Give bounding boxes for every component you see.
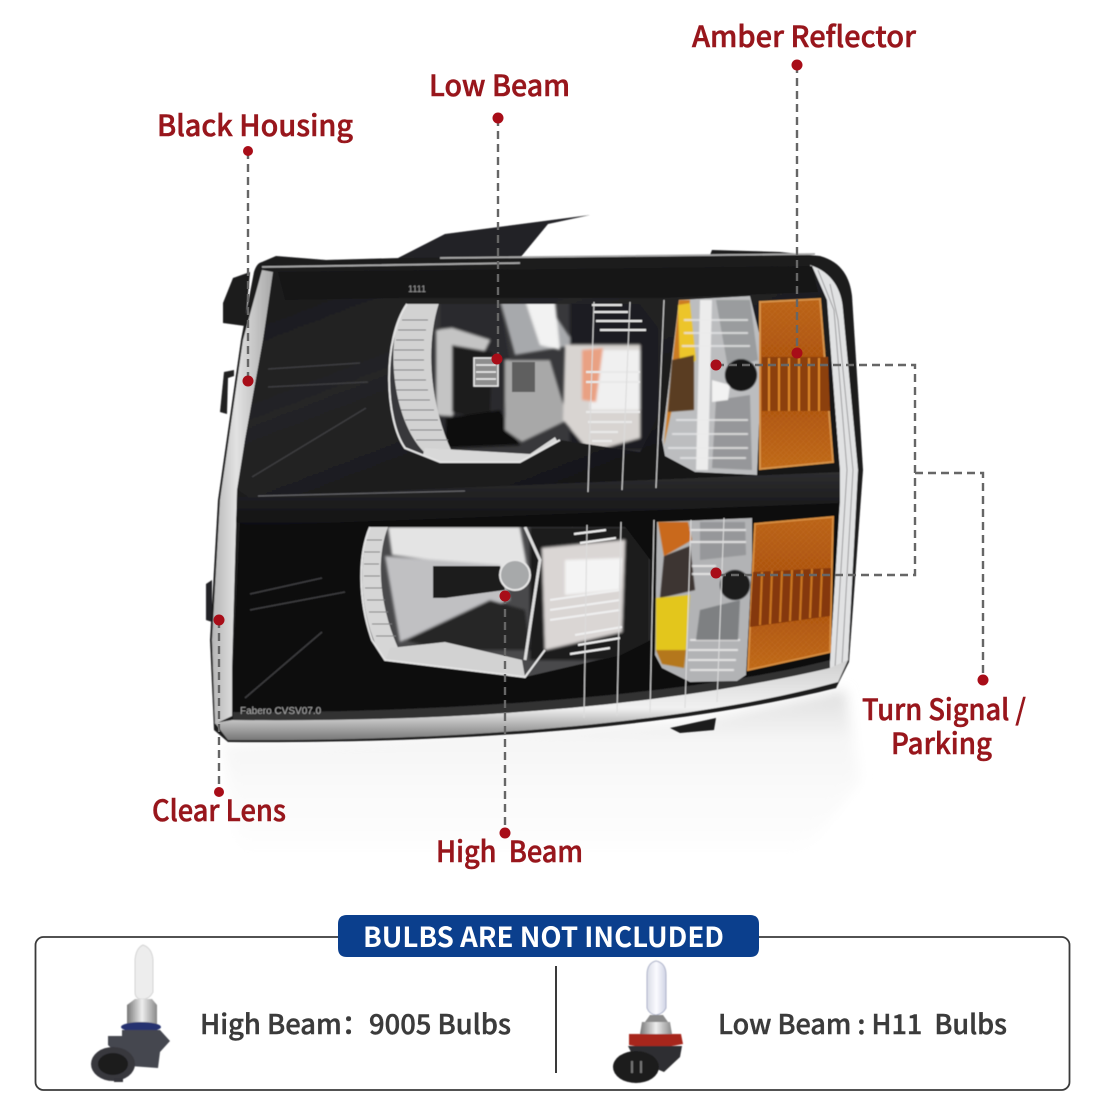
reflection under headlight: [222, 690, 860, 860]
upper beam lens: [390, 303, 660, 462]
label: High Beam: High Beam: [436, 829, 583, 871]
marker dots: [214, 60, 988, 838]
lower grey sill: [233, 660, 830, 722]
upper bulb socket: [725, 359, 757, 391]
label: Clear Lens: Clear Lens: [152, 788, 286, 830]
text: high beam bulb: High Beam：9005 Bulbs: [200, 1003, 511, 1042]
divider band: [236, 472, 840, 526]
left loop clip: [220, 370, 234, 414]
lower clear corner lens: [655, 518, 752, 682]
leader: clear lens: [218, 620, 220, 792]
lower left tab: [206, 580, 212, 622]
panel divider: [555, 966, 557, 1073]
icon: H11 bulb: [613, 961, 683, 1083]
top chrome line: [262, 254, 815, 267]
text: low beam bulb: Low Beam : H11 Bulbs: [718, 1003, 1007, 1042]
upper amber mesh and ribs: [762, 301, 832, 467]
icon: 9005 bulb: [91, 945, 170, 1082]
upper lamp bulb holder: [474, 358, 498, 386]
label: Black Housing: Black Housing: [157, 103, 353, 145]
right strip ribs: [818, 270, 853, 668]
label: Turn Signal / Parking: Parking: [891, 721, 992, 763]
label: Amber Reflector: Amber Reflector: [692, 14, 916, 56]
clear lens right strip: [810, 265, 858, 678]
lower bulb socket: [720, 570, 750, 600]
upper corner lens details: [664, 300, 758, 470]
lower lamp interior mark: [433, 566, 505, 598]
mounting bracket: [398, 215, 590, 258]
outer housing: [210, 250, 863, 742]
engraved text: Fabero CVSV07.0: [240, 706, 322, 717]
small mark: 1111: [408, 284, 426, 294]
label: Turn Signal / Parking: Turn Signal /: [862, 687, 1026, 729]
top band: [278, 266, 818, 300]
panel frame: [36, 937, 1070, 1090]
label: Low Beam: Low Beam: [429, 63, 570, 105]
leader: low beam: [497, 118, 499, 358]
leader lines: [219, 65, 983, 833]
leader: turn signal: [716, 365, 983, 680]
vertical lens flutes: [584, 300, 724, 718]
lower amber reflector: [748, 517, 833, 670]
left connector clip: [223, 272, 250, 326]
headlight assembly: [206, 215, 863, 742]
clear lens bottom strip: [215, 660, 848, 740]
upper amber reflector: [760, 299, 833, 469]
lower interior: [233, 500, 840, 714]
clear lens left strip: [212, 270, 273, 724]
divider highlight: [258, 491, 465, 496]
upper interior: [238, 266, 840, 498]
banner: BULBS ARE NOT INCLUDED: [363, 916, 724, 956]
leader: amber reflector: [796, 65, 798, 352]
embossed housing lines: [245, 363, 368, 698]
lower corner lens details: [656, 522, 750, 670]
lower beam lens: [355, 522, 655, 680]
label: Turn Signal / Parking: [862, 687, 1026, 763]
lower amber mesh and ribs: [750, 519, 832, 668]
leader: high beam: [504, 596, 506, 833]
panel: bulb information: [36, 915, 1070, 1090]
upper clear corner lens: [662, 296, 762, 475]
upper beam rim: [389, 304, 560, 462]
leader: black housing: [247, 151, 249, 380]
lower beam rim: [361, 527, 545, 677]
bottom tab: [670, 718, 716, 733]
